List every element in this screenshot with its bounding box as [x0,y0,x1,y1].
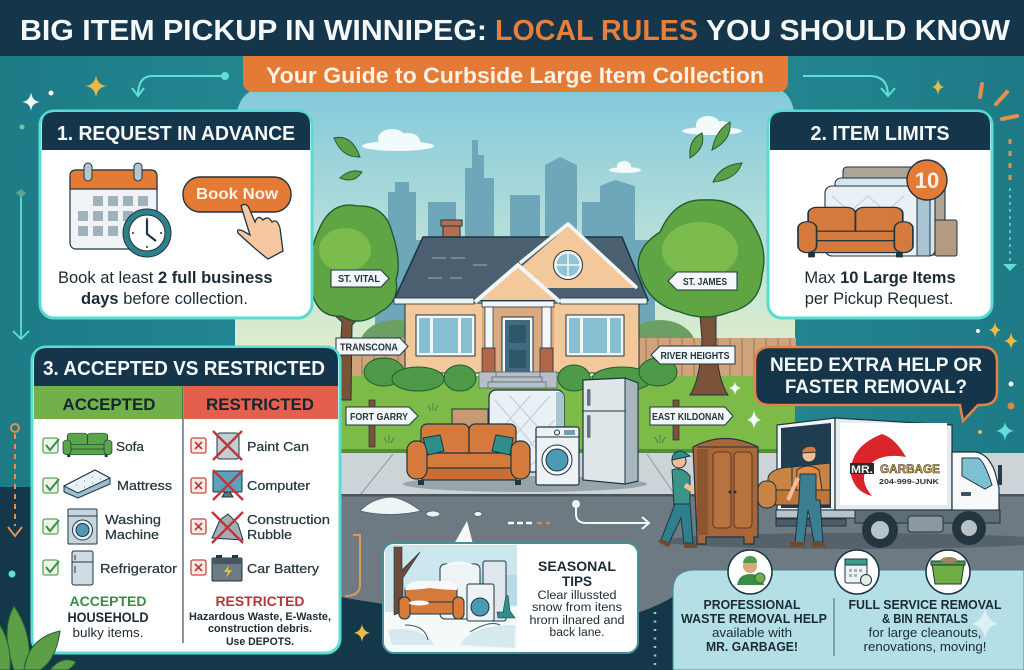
sign: East Kildonan: EAST KILDONAN [652,411,724,423]
worker left [658,451,703,548]
truck: rear wheel [862,512,898,548]
title bar: BIG ITEM PICKUP IN WINNIPEG: [20,15,487,47]
truck: open cargo area [777,418,835,510]
scene: city skyline [375,140,655,345]
logo: phone number: 204-999-JUNK [879,477,940,486]
accepted: washing machine: Washing [105,512,161,527]
panel 2 text [804,269,956,308]
decorative arrow: to step 1 [132,72,229,96]
sign: St. James: ST. JAMES [683,276,727,288]
scene: lawn [340,376,795,454]
house: roof [394,237,648,300]
accepted footer: HOUSEHOLD [68,610,149,625]
truck: chassis [855,510,1000,523]
snowy fridge [483,561,506,621]
service text: waste removal help [681,598,827,654]
scene: shrubs [364,358,677,391]
worker right [788,446,825,547]
seasonal text: TIPS [562,574,592,589]
wardrobe [693,438,758,544]
accepted footer [68,594,149,640]
scene: road surface line [340,494,1024,496]
curb items: orange sofa [407,424,530,485]
accepted: mattress [43,470,173,498]
restricted footer: construction debris. [208,623,312,635]
sign: Fort Garry: FORT GARRY [350,411,408,423]
service text: waste removal help: PROFESSIONAL [704,598,801,612]
service text: full service removal: renovations, moving! [864,640,986,654]
sign: St. James [668,272,737,290]
scene: right tree [638,200,764,395]
house: steps [479,372,557,388]
seasonal text: snow from itens [532,602,622,614]
panel 1 heading: 1. REQUEST IN ADVANCE [57,122,295,145]
house: main gable [520,224,637,288]
snow shovel [497,595,515,618]
service text: full service removal [848,598,1002,654]
accepted: washing machine [43,509,161,544]
sofa carried into truck [758,463,830,508]
callout: need extra help: FASTER REMOVAL? [785,377,967,398]
snow ground [385,606,517,651]
decorative arrow: to step 2 [803,76,895,96]
callout: need extra help: NEED EXTRA HELP OR [770,355,982,376]
restricted: construction rubble [191,512,330,543]
scene: clouds [362,116,742,173]
icon: calendar badge [835,550,879,594]
road arrow [508,501,649,529]
subtitle ribbon: Your Guide to Curbside Large Item Collection [266,63,764,88]
service text: waste removal help: WASTE REMOVAL HELP [681,612,827,626]
truck: rear bumper [776,510,856,526]
service text: waste removal help: available with [712,626,792,640]
curb items: refrigerator [583,378,638,484]
service text: waste removal help: MR. GARBAGE! [706,640,798,654]
service text: full service removal: for large cleanouts, [868,626,982,640]
seasonal text: back lane. [550,627,604,639]
seasonal text: Clear illussted [538,590,616,602]
panel 3 heading: 3. ACCEPTED VS RESTRICTED [43,357,325,380]
title bar [0,0,1024,56]
house: round window [554,250,582,280]
accepted footer: ACCEPTED [70,594,147,609]
icon: hand pointer [238,204,283,259]
background: dark lower left [0,487,350,670]
panel 1 heading [42,112,310,150]
curb items: washing machine [536,427,579,485]
accepted: sofa: Sofa [116,439,145,454]
sign: St. Vital [331,270,389,287]
house: door [502,317,533,372]
services divider [833,598,835,656]
curb items: shadow [403,476,647,492]
scene: floating leaves [334,122,742,182]
sign: Fort Garry [346,400,418,447]
restricted: computer: Computer [247,478,311,493]
logo: MR. wordmark: MR. [851,464,873,476]
title bar: YOU SHOULD KNOW [706,15,1011,47]
panel 2 heading: 2. ITEM LIMITS [810,122,950,145]
scene: sidewalk [340,453,1024,496]
panel 1: request in advance [40,111,312,318]
icon: bin badge [926,550,970,594]
scene: neighbourhood signs [331,270,737,447]
badge: 10: 10 [915,168,939,193]
panel 2: item limits [768,111,992,318]
snowy sofa [399,581,464,619]
decorative path: left orange dashes [8,424,22,536]
snowy mattress [440,564,480,619]
restricted: paint can: Paint Can [247,439,309,454]
restricted footer: Hazardous Waste, E-Waste, [189,611,331,623]
accepted: washing machine: Machine [105,527,159,542]
scene: house [394,220,648,388]
panel: seasonal tips [383,521,638,653]
badge: 10 [907,160,947,200]
curb items: box and mattress [452,390,564,472]
column heading: restricted [184,386,338,419]
truck: cab [952,452,1002,520]
decorative arrow: road left hook [345,535,360,596]
panel 1 text [58,269,273,308]
truck: cargo box with logo [835,418,952,510]
column heading: accepted [34,386,183,419]
logo: GARBAGE wordmark: GARBAGE [880,462,940,476]
decorative burst lines [980,84,1017,119]
service text: full service removal: & BIN RENTALS [882,612,968,626]
icon: clock [123,209,171,257]
house: left window [416,315,475,356]
house: porch [475,265,560,372]
sign: Transcona [336,338,408,355]
house: eaves [394,298,647,304]
accepted: refrigerator [43,551,178,585]
scene: road [340,495,1024,670]
seasonal text [530,559,624,639]
truck: tank [908,516,943,532]
panel 1 text: days before collection. [81,290,248,308]
bare tree [394,547,420,615]
sign: Transcona: TRANSCONA [340,342,398,354]
service text: full service removal: FULL SERVICE REMOVAL [848,598,1002,612]
panel 1 text: Book at least 2 full business [58,269,273,287]
accepted: refrigerator: Refrigerator [100,561,178,576]
sign: River Heights: RIVER HEIGHTS [660,350,730,362]
snowy washer [467,584,494,621]
house: chimney [441,220,462,238]
decorative dot [8,570,16,578]
sign: East Kildonan [650,400,733,440]
house: wall [405,303,639,373]
title bar: LOCAL RULES [495,15,698,47]
scene: left tree [310,205,398,400]
seasonal illustration [385,545,517,651]
snow patch [360,497,482,517]
icon: calendar [70,163,157,249]
column heading: accepted: ACCEPTED [62,396,156,414]
restricted: paint can [191,431,309,460]
panel 3 heading [34,348,338,386]
restricted: construction rubble: Rubble [247,527,292,542]
icon: worker badge [728,550,772,594]
accepted: mattress: Mattress [117,478,173,493]
restricted footer [189,594,331,648]
restricted footer: Use DEPOTS. [226,636,294,648]
seasonal text: SEASONAL [538,559,616,574]
decorative sparkle [972,608,998,638]
seasonal text: hrorn ilnared and [530,615,624,627]
panel 2 text: per Pickup Request. [805,290,953,308]
decorative dots [654,612,656,668]
restricted: computer [191,470,311,500]
scene: distant hedges [360,320,695,370]
panel 3: accepted vs restricted [32,347,340,653]
accepted: sofa [43,433,145,457]
background: dark lower middle band [340,595,676,670]
icon: stack of large items [825,167,957,256]
truck [776,418,1002,548]
decorative arrow: right dotted [1003,139,1017,271]
scene: sky [235,88,795,380]
restricted: car battery [191,555,320,581]
decorative arrow: left vertical [13,189,29,339]
icon: sofa [798,207,913,257]
sign: River Heights [651,346,735,364]
restricted footer: RESTRICTED [216,594,305,609]
column heading: restricted: RESTRICTED [206,396,314,414]
scene: backyard fence [340,338,796,378]
restricted: car battery: Car Battery [247,561,320,576]
restricted: construction rubble: Construction [247,512,330,527]
button: book now: Book Now [196,186,279,203]
truck: front wheel [952,511,986,545]
logo: red swoosh [851,434,906,496]
button: book now [183,177,291,212]
sign: St. Vital: ST. VITAL [338,273,381,285]
panel 2 text: Max 10 Large Items [804,269,956,287]
icon: corner leaves [0,606,76,670]
house: right window [566,315,624,356]
background: teal upper area [0,50,1024,500]
callout: need extra help [755,347,997,421]
subtitle ribbon [243,56,788,92]
accepted footer: bulky items. [72,626,144,640]
shadow under truck [660,533,1024,549]
panel 2 heading [770,112,990,150]
panel: services [655,550,1024,670]
